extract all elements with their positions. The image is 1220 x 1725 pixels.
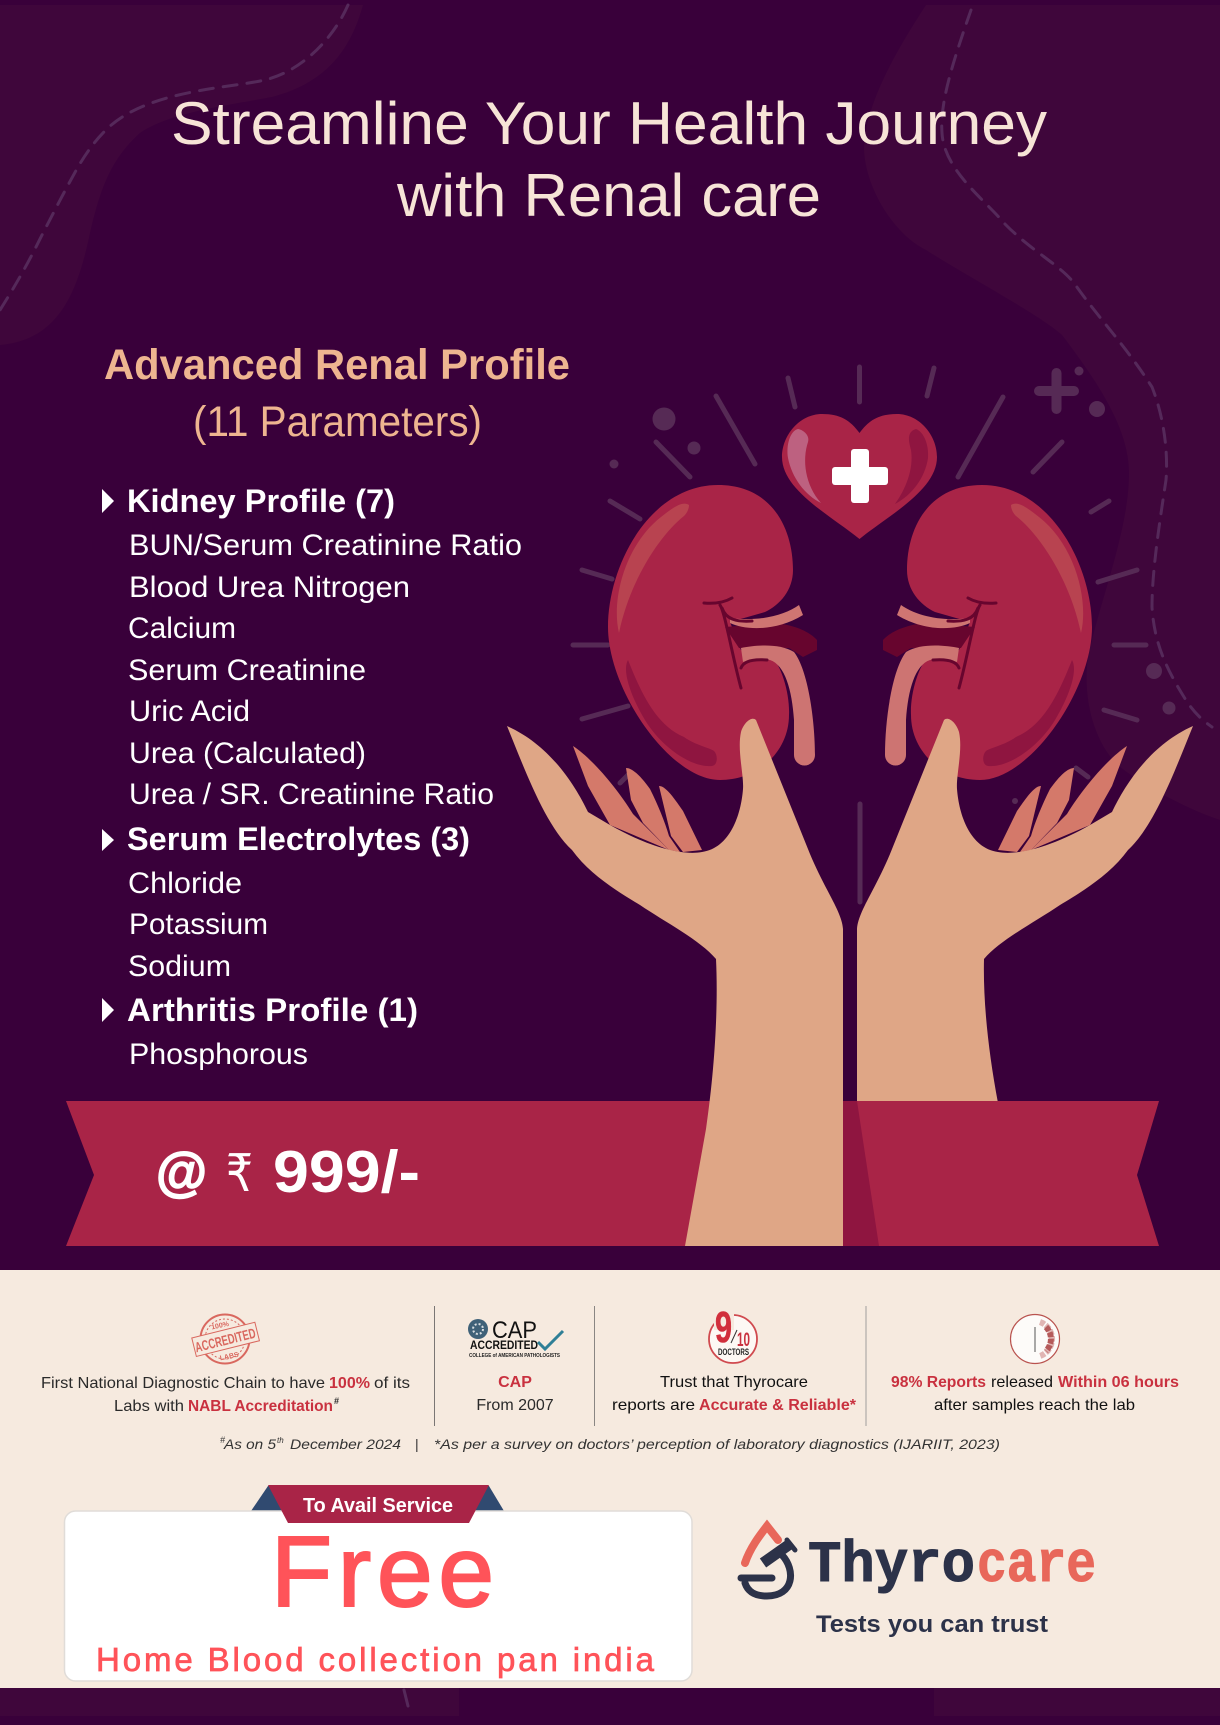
kidney profile items: Urea / SR. Creatinine Ratio bbox=[129, 778, 494, 811]
icon: right kidney bbox=[883, 485, 1092, 780]
text: reports released: 98% Reports bbox=[891, 1374, 986, 1391]
icon: accredited stamp: 100% bbox=[211, 1321, 230, 1332]
illustration: left hand bbox=[507, 719, 843, 1246]
heading: profile name: (11 Parameters) bbox=[193, 398, 482, 446]
wordmark: care bbox=[977, 1534, 1096, 1599]
text: NABL accreditation: # bbox=[334, 1396, 339, 1406]
tab: to avail service bbox=[268, 1485, 489, 1523]
text: reports released: after samples reach the lab bbox=[934, 1397, 1135, 1414]
subheading: serum electrolytes: Serum Electrolytes (3) bbox=[127, 821, 470, 857]
rays and sparkles behind the kidneys bbox=[573, 366, 1176, 902]
icon: left kidney bbox=[608, 485, 817, 780]
heading: profile name: Advanced Renal Profile bbox=[104, 341, 570, 389]
text: NABL accreditation: First National Diagnostic Chain to have bbox=[41, 1375, 325, 1392]
tab shadow corners bbox=[251, 1486, 504, 1511]
icon: stopwatch bbox=[1010, 1314, 1060, 1364]
price bbox=[156, 1139, 420, 1205]
serum electrolytes items: Chloride bbox=[128, 867, 242, 900]
badge: NABL accreditation bbox=[41, 1314, 410, 1415]
bullet: kidney profile bbox=[102, 489, 114, 513]
icon: 9/10 doctors bbox=[709, 1303, 757, 1363]
icon: CAP logo: COLLEGE of AMERICAN PATHOLOGISTS bbox=[469, 1353, 560, 1359]
footnote: As on 5 bbox=[223, 1436, 276, 1452]
icon: drop and microscope bbox=[741, 1526, 795, 1596]
heading: profile name bbox=[104, 341, 570, 446]
text: home blood collection: Home Blood collection pan india bbox=[96, 1641, 655, 1678]
icon: 9/10 doctors: DOCTORS bbox=[718, 1347, 749, 1357]
icon: 9/10 doctors: 10 bbox=[737, 1330, 750, 1351]
parameter list bbox=[102, 483, 522, 1071]
kidney profile items: Urea (Calculated) bbox=[129, 737, 366, 770]
text: CAP from 2007: From 2007 bbox=[476, 1397, 554, 1414]
text: trust that Thyrocare bbox=[612, 1374, 857, 1414]
arthritis profile item: Phosphorous bbox=[129, 1038, 308, 1071]
logo: Thyrocare bbox=[741, 1526, 1096, 1638]
kidney profile items: Serum Creatinine bbox=[128, 654, 366, 687]
text: CAP from 2007: CAP bbox=[498, 1374, 532, 1391]
subheading: kidney profile: Kidney Profile (7) bbox=[127, 483, 395, 519]
cream footer panel bbox=[0, 1270, 1220, 1688]
icon: accredited stamp: ACCREDITED bbox=[193, 1325, 257, 1355]
text: reports released: released bbox=[991, 1374, 1053, 1391]
tab: to avail service: To Avail Service bbox=[303, 1495, 453, 1517]
kidney profile items: BUN/Serum Creatinine Ratio bbox=[129, 529, 522, 562]
kidney profile items bbox=[128, 529, 522, 811]
text: CAP from 2007 bbox=[476, 1374, 554, 1414]
text: NABL accreditation: of its bbox=[374, 1375, 410, 1392]
text: trust that Thyrocare: reports are bbox=[612, 1397, 695, 1414]
icon: CAP logo bbox=[468, 1317, 563, 1359]
badge: 9 of 10 doctors bbox=[612, 1303, 857, 1414]
bullet: serum electrolytes bbox=[102, 829, 114, 851]
icon: 9/10 doctors: 9 bbox=[715, 1303, 732, 1352]
text: trust that Thyrocare: Trust that Thyrocare bbox=[660, 1374, 808, 1391]
price ribbon bbox=[66, 1101, 1159, 1246]
serum electrolytes items: Sodium bbox=[128, 950, 231, 983]
icon: CAP logo: ACCREDITED bbox=[470, 1338, 538, 1352]
text: trust that Thyrocare: Accurate & Reliable* bbox=[699, 1397, 857, 1414]
kidney profile items: Uric Acid bbox=[129, 695, 250, 728]
serum electrolytes items: Potassium bbox=[129, 908, 268, 941]
footnote: | bbox=[415, 1436, 419, 1452]
title: with Renal care bbox=[396, 162, 821, 229]
footnote: *As per a survey on doctors’ perception of laboratory diagnostics (IJARIIT, 2023) bbox=[434, 1436, 1000, 1452]
text: NABL accreditation bbox=[41, 1375, 410, 1415]
price: 999/- bbox=[273, 1139, 420, 1205]
kidney profile items: Calcium bbox=[128, 612, 236, 645]
illustration: right hand bbox=[857, 719, 1193, 1103]
kidney profile items: Blood Urea Nitrogen bbox=[129, 571, 410, 604]
icon: CAP logo: CAP bbox=[492, 1317, 537, 1344]
text: NABL accreditation: Labs with bbox=[114, 1398, 184, 1415]
text: reports released bbox=[891, 1374, 1179, 1414]
title bbox=[171, 90, 1047, 229]
text: reports released: Within 06 hours bbox=[1058, 1374, 1179, 1391]
text: free: Free bbox=[271, 1516, 494, 1628]
badge: report turnaround bbox=[891, 1314, 1179, 1414]
text: NABL accreditation: NABL Accreditation bbox=[188, 1398, 333, 1415]
footnote: # bbox=[220, 1435, 226, 1445]
badge: CAP accreditation bbox=[468, 1317, 563, 1414]
panel: free home collection bbox=[64, 1485, 692, 1681]
subheading: arthritis profile: Arthritis Profile (1) bbox=[127, 992, 418, 1028]
title: Streamline Your Health Journey bbox=[171, 90, 1047, 157]
icon: heart with cross bbox=[782, 414, 937, 539]
text: NABL accreditation: 100% bbox=[329, 1375, 370, 1392]
footnote bbox=[220, 1435, 1000, 1452]
footnote: th bbox=[277, 1436, 284, 1445]
card bbox=[64, 1511, 692, 1681]
price: @ bbox=[156, 1142, 207, 1202]
serum electrolytes items bbox=[128, 867, 268, 983]
footnote: December 2024 bbox=[290, 1436, 401, 1452]
wordmark bbox=[808, 1534, 1096, 1599]
tagline: Tests you can trust bbox=[816, 1611, 1048, 1638]
bullet: arthritis profile bbox=[102, 998, 114, 1022]
icon: accredited stamp: LABS bbox=[219, 1352, 240, 1362]
icon: accredited stamp bbox=[192, 1314, 259, 1364]
wordmark: Thyro bbox=[808, 1534, 975, 1599]
price: ₹ bbox=[226, 1144, 253, 1204]
